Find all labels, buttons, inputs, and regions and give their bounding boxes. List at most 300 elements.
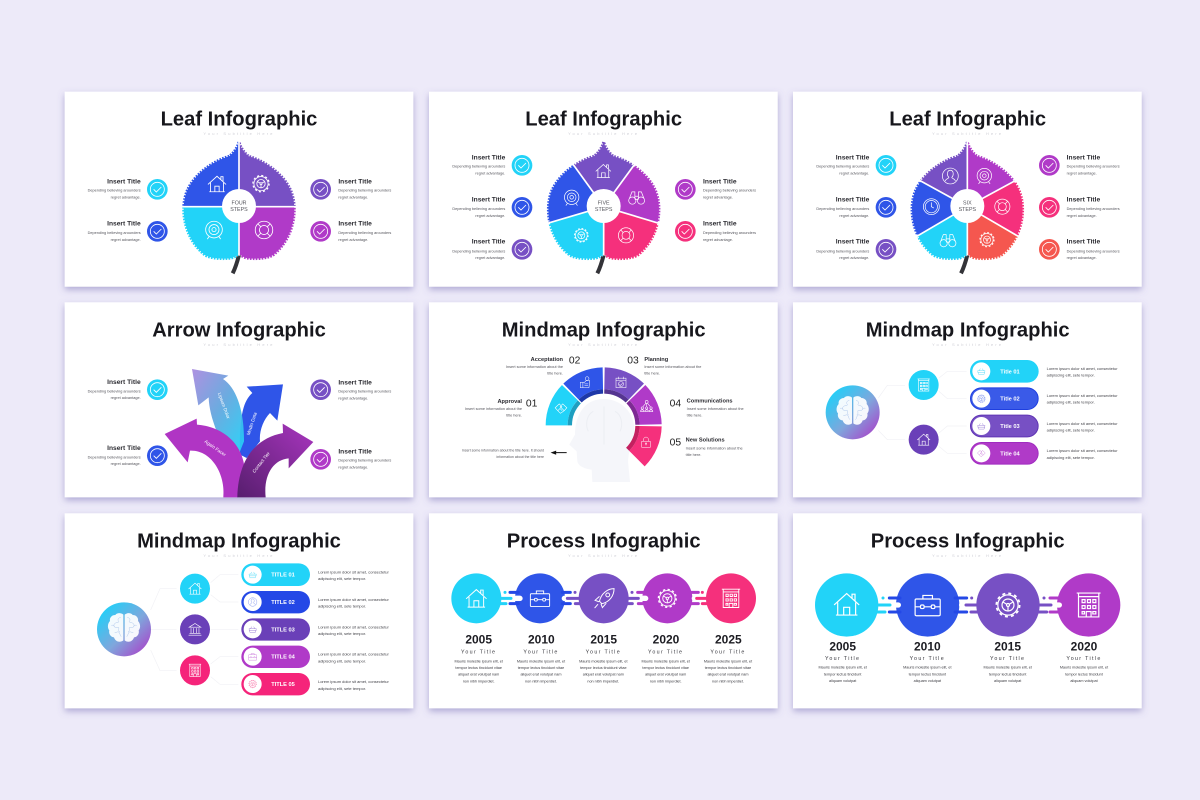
text block: regret advantage. [338,396,368,400]
description 05: adipiscing elit, sete tempor. [318,686,366,691]
note text: information about the title here [496,455,544,459]
connector blobs [873,598,1062,612]
text block: Insert Title [338,449,372,456]
subtitle: Your Subtitle Here [932,131,1003,136]
text block [816,197,870,218]
description 05 [318,679,390,691]
step text 2020 [641,632,691,683]
label 05: Insert some information about the [686,446,743,450]
text block: regret advantage. [475,214,505,218]
step text 2020: 2020 [653,632,680,646]
arrow: contact tier: Contact Tier [251,451,271,474]
check badge [876,197,896,218]
leaf diagram: four segments [182,142,296,260]
arrow: modio data: Modio Data [246,411,258,436]
step circle 2010 [896,573,959,637]
label 05: title here. [686,453,701,457]
panel: process infographic four steps [793,513,1142,708]
segment 01 [557,393,579,425]
label 03: 03 [627,355,639,366]
panel card [429,92,778,287]
icon: lifebuoy [618,228,634,243]
leaf stem [233,255,239,273]
center label: five steps: FIVE [598,200,610,206]
arrow: again facer: Again Facer [204,439,227,458]
text block: Depending believing arounders [88,231,141,235]
text block [88,445,141,466]
check badge [512,239,532,260]
description 03: Lorem ipsum dolor sit amet, consectetur [1047,421,1118,426]
description 05: Lorem ipsum dolor sit amet, consectetur [318,679,390,684]
check badge [310,379,331,400]
description 04 [318,652,390,663]
text block: Depending believing arounders [1067,249,1120,253]
description 04: Lorem ipsum dolor sit amet, consectetur [1047,448,1118,453]
check badge [310,449,331,470]
text block: Depending believing arounders [452,207,505,211]
step text 2010: tempor lectus tincidunt vitae [518,666,564,670]
center label: six steps [950,189,984,223]
pill: title 05: TITLE 05 [271,682,295,688]
panel: mindmap infographic head [429,302,778,497]
brain node [97,602,151,656]
icon: clock [923,199,939,215]
description 04: adipiscing elit, sete tempor. [318,658,366,663]
pill: title 04: TITLE 04 [271,655,296,661]
text block: regret advantage. [111,196,141,200]
pill: title 02: TITLE 02 [271,600,295,606]
icon: target [977,168,992,184]
check badge [876,155,896,176]
text block: Insert Title [107,379,141,386]
step text 2020: Mauris molestie ipsum elit, et [1060,666,1109,670]
arrow [552,451,567,454]
text block: Insert Title [836,154,870,161]
text block: Insert Title [338,221,372,228]
label 04: Insert some information about the [687,407,744,411]
check badge [147,179,168,200]
text block: regret advantage. [703,196,733,200]
subtitle: Your Subtitle Here [568,342,639,347]
description 01: Lorem ipsum dolor sit amet, consectetur [1047,366,1118,371]
pill: title 01: TITLE 01 [271,573,295,579]
text block [338,221,391,242]
step text 2015: aliquam volutpat [994,679,1022,683]
text block: Insert Title [107,445,141,452]
pill: title 01 [970,360,1039,383]
title: Process Infographic [507,531,701,553]
text block [452,154,506,176]
subtitle: Your Subtitle Here [203,342,275,347]
step text 2020: 2020 [1071,639,1098,653]
icon: gear [253,176,269,192]
description 02: Lorem ipsum dolor sit amet, consectetur [318,597,390,602]
panel card [65,92,413,287]
text block [338,449,391,469]
icon: network [641,400,653,412]
step text 2015: 2015 [994,639,1021,653]
step circle 2005 [815,573,878,637]
step text 2010: Your Title [523,650,559,656]
pill: title 05 [241,673,310,695]
text block: Depending believing arounders [816,207,869,211]
check badge [310,179,331,200]
label 04 [670,399,744,418]
step text 2010: aliquet erat volutpat nam [520,673,562,677]
step circle 2015 [976,573,1040,637]
subtitle: Your Subtitle Here [568,553,639,558]
label 01: Approval [497,399,522,405]
description 01: Lorem ipsum dolor sit amet, consectetur [318,569,390,574]
node: house [180,574,210,604]
label 01 [465,399,538,418]
step text 2010 [903,639,952,683]
label 02 [506,355,581,376]
description 01: adipiscing elit, sete tempor. [318,576,366,581]
panel: leaf infographic four steps [65,92,413,293]
text block: Depending believing arounders [88,389,141,393]
step text 2010 [517,632,566,683]
step text 2015: Your Title [586,650,621,656]
leaf stem [597,255,604,273]
icon: person [942,168,958,184]
text block: Depending believing arounders [338,459,391,463]
pill: title 01: Title 01 [1000,369,1020,375]
description 04: Lorem ipsum dolor sit amet, consectetur [318,652,390,657]
pill: title 04 [970,442,1038,464]
node: house [909,425,939,455]
text block: regret advantage. [839,172,869,176]
text block [1067,154,1120,176]
text block: Insert Title [107,221,141,228]
step text 2010: Mauris molestie ipsum elit, et [903,666,952,670]
text block: Depending believing arounders [816,249,869,253]
panel card [793,302,1142,497]
text block: Depending believing arounders [88,455,141,459]
leaf stem [961,255,967,273]
step circle 2020 [642,573,692,623]
leaf diagram: six segments [910,142,1024,260]
text block [1067,197,1120,218]
text block [88,379,141,400]
step circle 2025 [706,573,756,623]
node: building [180,655,210,685]
center label: four steps [222,189,256,223]
text block [88,178,141,200]
text block: Depending believing arounders [452,165,505,169]
text block: Depending believing arounders [816,165,869,169]
step text 2005 [818,639,868,683]
text block: regret advantage. [703,238,733,242]
arrow: contact tier [237,424,313,497]
description 03 [318,624,390,636]
text block: Insert Title [107,178,141,185]
step text 2005: tempor lectus tincidunt [824,672,862,676]
text block: Insert Title [703,178,737,185]
title: Process Infographic [871,531,1065,553]
label 02: Insert some information about the [506,365,563,369]
step text 2010: non nibh imperdiet. [525,679,557,683]
step text 2020 [1060,639,1109,683]
description 03: Lorem ipsum dolor sit amet, consectetur [318,624,390,629]
connector blobs [499,592,710,604]
text block: regret advantage. [338,196,368,200]
description 04: adipiscing elit, sete tempor. [1047,455,1095,460]
step text 2005: non nibh imperdiet. [463,679,495,683]
panel: arrow infographic [65,302,413,497]
title: Mindmap Infographic [866,320,1070,342]
title: Arrow Infographic [152,320,326,342]
check badge [876,239,896,260]
label 04: Communications [687,399,733,405]
check badge [1039,155,1060,176]
title: Mindmap Infographic [137,531,341,553]
label 02: 02 [569,355,581,366]
panel card [65,513,413,708]
step text 2005: Mauris molestie ipsum elit, et [818,666,868,670]
description 02: adipiscing elit, sete tempor. [318,604,366,609]
leaf diagram: five segments [546,142,660,260]
step text 2025: Your Title [710,650,746,656]
text block: regret advantage. [111,462,141,466]
label 05: New Solutions [686,438,725,444]
segment 03 [604,378,636,401]
text block: Insert Title [1067,154,1100,161]
connector lines [878,371,967,453]
subtitle: Your Subtitle Here [932,342,1003,347]
panel: leaf infographic five steps [429,92,778,307]
step text 2015: tempor lectus tincidunt [989,672,1027,676]
subtitle: Your Subtitle Here [203,553,275,558]
text block: Depending believing arounders [452,249,505,253]
step text 2015: non nibh imperdiet. [587,679,619,683]
subtitle: Your Subtitle Here [203,131,275,136]
segment 04 [628,393,651,425]
head silhouette [569,399,634,482]
description 02 [318,597,390,609]
step circle 2020 [1057,573,1120,637]
step text 2015: 2015 [590,632,617,646]
step text 2005: 2005 [465,632,492,646]
center label: four steps: STEPS [230,207,248,213]
step text 2015: tempor lectus tincidunt vitae [580,666,627,670]
text block [1067,239,1120,260]
text block [88,221,141,242]
panel card [65,302,413,497]
text block: Insert Title [472,197,506,204]
step text 2010: tempor lectus tincidunt [909,672,947,676]
icon: binoculars [940,235,956,247]
pill: title 03: TITLE 03 [271,627,295,633]
description 03: adipiscing elit, sete tempor. [1047,428,1095,433]
text block: Depending believing arounders [338,231,391,235]
text block: Depending believing arounders [338,189,391,193]
step text 2025: tempor lectus tincidunt vitae [705,666,751,670]
center label: six steps: STEPS [959,207,977,213]
text block [338,178,391,200]
step text 2015: aliquet erat volutpat nam [583,673,624,677]
description 03 [1047,421,1118,433]
title: Leaf Infographic [161,109,317,131]
step text 2005: Your Title [461,650,496,656]
check badge [310,221,331,242]
title: Mindmap Infographic [502,320,706,342]
step text 2010: Your Title [910,656,945,662]
center label: five steps [587,189,621,223]
arrow: again facer [165,419,245,497]
label 03: Insert some information about the [644,365,701,369]
text block: regret advantage. [111,238,141,242]
step text 2020: tempor lectus tincidunt vitae [642,666,689,670]
step circle 2015 [579,573,629,623]
step text 2010: 2010 [528,632,555,646]
check badge [512,155,532,176]
icon: target [564,190,579,206]
label 01: Insert some information about the [465,407,522,411]
description 02 [1047,393,1118,405]
label 01: 01 [526,399,538,410]
icon: house [596,164,611,177]
step circle 2005 [451,573,501,623]
text block: regret advantage. [839,256,869,260]
icon: lock [642,437,650,447]
check badge [147,221,168,242]
center label: four steps: FOUR [231,200,247,206]
check badge [675,221,696,242]
text block [338,379,391,400]
step text 2020: aliquet erat volutpat nam [645,673,686,677]
text block: Depending believing arounders [88,189,141,193]
panel: mindmap infographic four titles [793,302,1142,497]
pill: title 01 [241,563,310,586]
text block: regret advantage. [1067,214,1097,218]
icon: idea [580,377,590,388]
text block: Insert Title [338,178,372,185]
step text 2020: Your Title [1066,656,1102,662]
step text 2015: Mauris molestie ipsum elit, et [983,666,1033,670]
step text 2025: 2025 [715,632,742,646]
step text 2025: non nibh imperdiet. [712,679,744,683]
step circle 2010 [515,573,565,623]
note text: Insert some information about the title here. It should [462,448,544,452]
label 02: title here. [547,372,563,376]
text block: regret advantage. [839,214,869,218]
text block: regret advantage. [338,238,368,242]
panel card [793,92,1142,287]
subtitle: Your Subtitle Here [568,131,639,136]
description 03: adipiscing elit, sete tempor. [318,631,366,636]
step text 2005: aliquet erat volutpat nam [458,673,499,677]
step text 2020: Mauris molestie ipsum elit, et [641,659,691,663]
text block [703,178,756,200]
step text 2025: Mauris molestie ipsum elit, et [704,659,753,663]
text block: regret advantage. [1067,256,1097,260]
pill: title 02 [970,388,1038,409]
label 04: 04 [670,399,681,410]
connector lines [151,575,238,684]
step text 2005: Your Title [825,656,860,662]
pill: title 04: Title 04 [1000,451,1021,457]
text block: Insert Title [338,379,372,386]
text block: Insert Title [1067,239,1100,246]
panel card [429,513,778,708]
check badge [512,197,532,218]
icon: calendar [616,377,626,388]
description 01: adipiscing elit, sete tempor. [1047,373,1095,378]
check badge [675,179,696,200]
note text [462,448,544,459]
text block: Insert Title [836,197,870,204]
title: Leaf Infographic [525,109,682,131]
arrow: modio data [240,384,283,458]
description 01 [318,569,390,581]
pill: title 03 [241,618,310,641]
icon: lifebuoy [255,221,273,239]
check badge [1039,197,1060,218]
check badge [1039,239,1060,260]
pill: title 03: Title 03 [1000,424,1020,430]
text block [816,154,870,176]
subtitle: Your Subtitle Here [932,553,1003,558]
step text 2010: aliquam volutpat [914,679,942,683]
node: bank [180,614,210,644]
text block: Depending believing arounders [338,390,391,394]
text block: regret advantage. [111,396,141,400]
panel: process infographic five steps [429,513,778,708]
text block [452,197,506,218]
arrow: lipsum dolor [192,369,244,451]
icon: gear [575,229,588,242]
description 02: Lorem ipsum dolor sit amet, consectetur [1047,393,1118,398]
icon: lifebuoy [995,199,1010,214]
segment 05 [628,426,651,459]
step text 2005: Mauris molestie ipsum elit, et [454,659,504,663]
panel: leaf infographic six steps [793,92,1142,307]
title: Leaf Infographic [889,109,1046,131]
pill: title 02 [241,591,310,613]
text block: Insert Title [836,239,870,246]
step text 2015: Mauris molestie ipsum elit, et [579,659,628,663]
step text 2015 [579,632,628,683]
label 04: title here. [687,414,702,418]
step text 2005: tempor lectus tincidunt vitae [455,666,502,670]
step text 2020: non nibh imperdiet. [650,679,682,683]
icon: handshake [555,404,567,413]
step text 2020: aliquam volutpat [1070,679,1099,683]
step text 2005: 2005 [829,639,856,653]
node: calendar grid [909,370,939,400]
text block: Depending believing arounders [1067,165,1120,169]
step text 2005 [454,632,504,683]
step text 2010: Mauris molestie ipsum elit, et [517,659,566,663]
text block: regret advantage. [475,256,505,260]
description 02: adipiscing elit, sete tempor. [1047,400,1095,405]
text block [816,239,870,260]
label 05 [670,438,743,457]
brain node [826,385,880,439]
center label: five steps: STEPS [595,207,613,213]
text block: Depending believing arounders [703,189,756,193]
label 01: title here. [506,414,522,418]
step text 2005: aliquam volutpat [829,679,857,683]
pill: title 03 [970,415,1038,437]
segment 02 [571,378,603,401]
text block: Depending believing arounders [1067,207,1120,211]
description 01 [1047,366,1118,378]
step text 2025: aliquet erat volutpat nam [707,673,749,677]
step text 2020: tempor lectus tincidunt [1065,672,1104,676]
pill: title 02: Title 02 [1000,397,1020,403]
